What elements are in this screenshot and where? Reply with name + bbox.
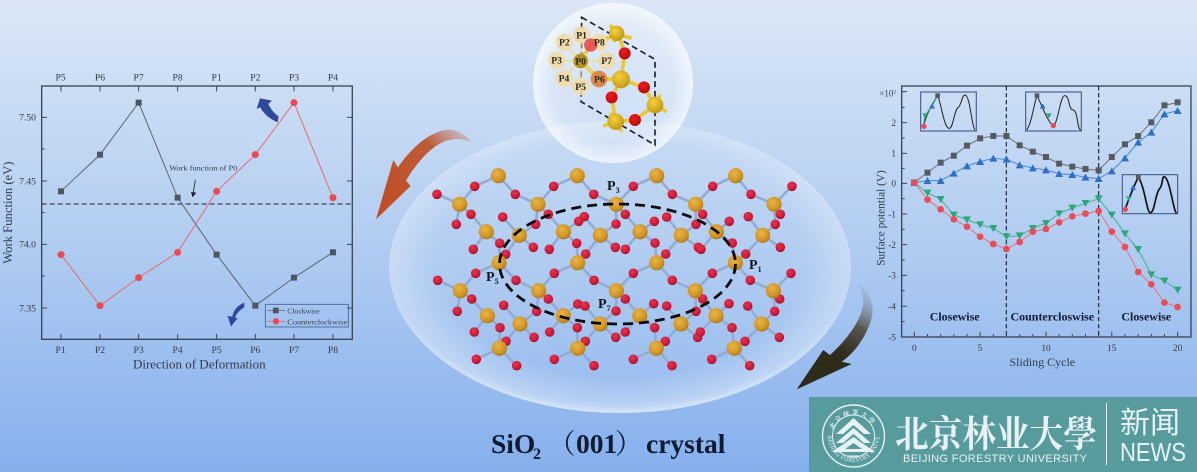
phase labels: Closewise [1121,309,1172,323]
x axis labels [912,344,1183,354]
news label chinese: 新闻 [1120,407,1180,440]
university english name: BEIJING FORESTRY UNIVERSITY [903,453,1088,465]
point labels: 1 [758,265,762,274]
icon: blue curved arrow up [257,98,279,122]
y axis labels: 2 [891,119,896,129]
inset: wave left [921,92,976,131]
y axis labels: -3 [888,272,896,282]
point labels [486,179,762,313]
phase labels: Closewise [930,309,980,323]
y axis labels [888,119,896,343]
chart: work function [1,72,352,372]
bottom axis labels [56,345,338,356]
x axis title: Sliding Cycle [1010,355,1075,369]
panel: top molecule sphere [533,3,693,163]
crystal structure [432,168,797,371]
icon: university seal: 北京林業大學 [830,409,876,430]
panel: crystal plate ellipse [389,121,851,413]
deformation point labels: P2 [559,38,570,49]
deformation point labels: P3 [551,56,562,67]
top axis labels: P4 [328,72,338,83]
inset: wave middle [1026,92,1081,131]
top axis labels: P6 [95,72,105,83]
cycle dividers [1006,86,1099,337]
point labels: P [486,270,495,285]
annotation: work function of P0 [169,164,237,197]
series: blue triangles [914,111,1178,183]
series: red circles [914,183,1178,307]
series: clockwise [61,103,333,306]
arrow: red curved arrow to left chart [376,130,472,219]
point labels: P [749,258,758,273]
legend: Counterclockwise [287,317,348,326]
series: green triangles [914,183,1178,290]
bottom axis labels: P2 [95,345,105,356]
top axis labels [56,72,338,83]
axes frame [42,86,352,339]
reference dashed line [42,202,352,206]
point labels: 5 [495,277,499,286]
inset: wave right [1122,175,1178,214]
top axis labels: P7 [134,72,144,83]
deformation point labels [551,30,612,93]
annotation: work function of P0: Work function of P0 [169,164,237,173]
title: crystal [646,428,726,459]
title: ） [615,421,642,461]
news label english: NEWS [1120,437,1186,467]
x axis labels: 15 [1107,344,1117,354]
axes frame [902,86,1191,337]
y axis labels [19,113,36,314]
deformation point labels: P1 [576,30,587,41]
bottom axis labels: P6 [250,345,261,356]
deformation point labels: P0 [575,56,586,67]
y axis labels: 7.45 [19,176,36,187]
x axis labels: 5 [978,344,983,354]
point labels: 3 [616,186,620,195]
deformation point labels: P4 [559,74,570,85]
bonds [437,176,792,366]
legend [265,304,348,327]
deformation point labels: P8 [594,38,605,49]
scale factor: ×10 [879,89,893,99]
title: 2 [533,446,541,463]
y axis labels: -1 [888,210,896,220]
x axis labels: 0 [912,344,917,354]
divider [1106,403,1108,465]
bottom axis labels: P7 [289,345,299,356]
bottom axis labels: P8 [328,345,338,356]
y axis title: Surface potential (V) [875,170,887,266]
series: gray squares [914,102,1178,183]
icon: blue curved arrow down [228,303,244,327]
title: （ [548,421,576,461]
title: SiO [491,428,535,459]
university name: 北京林业大學 [895,404,1097,458]
y axis labels: 7.35 [19,303,36,314]
oxygen atoms [432,182,797,371]
series: counterclockwise [61,103,333,306]
bottom axis labels: P5 [212,345,222,356]
title: 001 [576,428,617,459]
bottom axis labels: P1 [56,345,66,356]
legend: Clockwise [287,307,320,316]
x axis title: Direction of Deformation [133,357,266,372]
silicon atoms [452,168,782,356]
x axis labels: 10 [1041,344,1051,354]
bottom axis labels: P4 [173,345,183,356]
title [491,421,726,463]
x axis labels: 20 [1173,344,1183,354]
y axis labels: 0 [891,180,896,190]
y axis labels: 74.0 [19,240,36,251]
deformation point labels: P5 [575,82,586,93]
point labels: P [598,297,607,312]
phase labels: Countercloswise [1010,309,1095,323]
y axis labels: 7.50 [19,113,36,124]
y axis labels: -4 [888,303,896,313]
deformation point labels: P7 [601,56,612,67]
point labels: 7 [607,304,611,313]
phase labels [930,309,1172,323]
chart: surface potential [875,86,1191,369]
point labels: P [607,179,616,194]
y axis labels: 1 [891,150,896,160]
top axis labels: P1 [212,72,222,83]
icon: university seal [822,404,886,468]
deformation point labels: P6 [594,74,605,85]
top axis labels: P5 [56,72,66,83]
top axis labels: P3 [289,72,299,83]
icon: university seal: 1952 [848,454,859,459]
y axis title: Work Function (eV) [1,161,15,264]
icon: university seal: BEIJING FORESTRY UNIVERSITY [827,436,880,462]
molecule bonds and atoms [548,25,667,132]
arrow: dark curved arrow to logo [797,283,873,389]
scale factor: 2 [893,89,896,95]
bottom axis labels: P3 [134,345,144,356]
dashed ellipse path [500,204,736,324]
y axis labels: -5 [888,333,896,343]
unit cell outline [581,17,655,145]
top axis labels: P8 [173,72,183,83]
y axis labels: -2 [888,241,896,251]
top axis labels: P2 [250,72,261,83]
